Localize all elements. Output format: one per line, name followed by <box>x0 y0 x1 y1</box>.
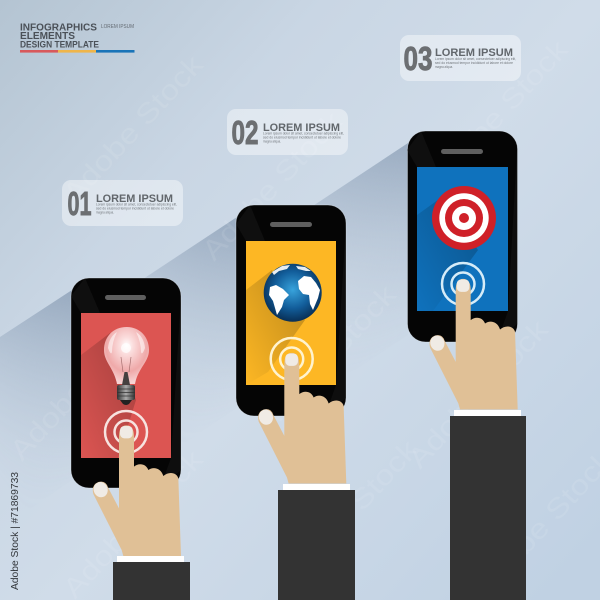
label 02: Lorem ipsum dolor sit amet, consectetuer adipiscing elit, <box>263 132 344 136</box>
watermarks: Adobe Stock <box>422 33 575 194</box>
watermarks: Adobe Stock <box>57 48 210 209</box>
long shadow: phone 2 <box>145 217 237 366</box>
title block: LOREM IPSUM <box>101 24 134 30</box>
colour bar <box>20 50 134 53</box>
stock credit: Adobe Stock | #71869733 <box>9 472 21 590</box>
title block: ELEMENTS <box>20 31 75 42</box>
long shadow: phone 3 <box>314 143 408 301</box>
icon: light bulb <box>104 327 149 405</box>
label 02: sed do eiusmod tempor incididunt ut labore et dolore <box>263 136 341 140</box>
screen shadow <box>246 270 305 385</box>
label 01: 01 <box>68 185 92 222</box>
long shadow: phone 1 <box>0 290 72 434</box>
label 03: Lorem ipsum dolor sit amet, consectetuer adipiscing elit, <box>435 57 516 61</box>
label 03: LOREM IPSUM <box>435 47 513 59</box>
icon: globe <box>264 264 322 322</box>
phone 3 <box>407 131 518 342</box>
touch rings <box>271 338 313 380</box>
screen shadow <box>417 197 478 311</box>
touch rings <box>442 263 484 305</box>
phone 1 <box>71 278 181 488</box>
watermarks: Adobe Stock <box>57 443 210 600</box>
hand and sleeve 1 <box>91 425 190 600</box>
icon: target <box>432 186 496 250</box>
watermarks: Adobe Stock <box>272 433 425 594</box>
label 01 <box>62 180 183 226</box>
label 02 <box>227 109 348 155</box>
hand and sleeve 2 <box>257 353 355 600</box>
title block <box>20 22 134 53</box>
label 02: magna aliqua. <box>263 140 281 144</box>
label 01: sed do eiusmod tempor incididunt ut labore et dolore <box>96 206 174 210</box>
screen shadow <box>81 333 136 458</box>
screen: yellow <box>246 241 336 385</box>
watermarks: Adobe Stock <box>402 313 555 474</box>
label 01: magna aliqua. <box>96 210 114 214</box>
label 02: 02 <box>232 114 258 151</box>
watermarks: Adobe Stock <box>250 278 403 439</box>
watermarks: Adobe Stock <box>196 105 349 266</box>
label 03: 03 <box>404 40 432 77</box>
watermarks: Adobe Stock <box>467 443 600 600</box>
label 01: Lorem ipsum dolor sit amet, consectetuer adipiscing elit, <box>96 202 177 206</box>
hand and sleeve 3 <box>428 279 526 600</box>
touch rings <box>105 411 147 453</box>
label 03: sed do eiusmod tempor incididunt ut labore et dolore <box>435 61 513 65</box>
label 03: magna aliqua. <box>435 65 453 69</box>
label 01: LOREM IPSUM <box>96 193 173 205</box>
watermarks: Adobe Stock <box>4 305 157 466</box>
screen: blue <box>417 167 508 311</box>
title block: DESIGN TEMPLATE <box>20 40 99 51</box>
label 03 <box>400 35 521 81</box>
title block: INFOGRAPHICS <box>20 22 97 34</box>
screen: red <box>81 313 171 458</box>
label 02: LOREM IPSUM <box>263 122 340 134</box>
phone 2 <box>236 205 346 416</box>
